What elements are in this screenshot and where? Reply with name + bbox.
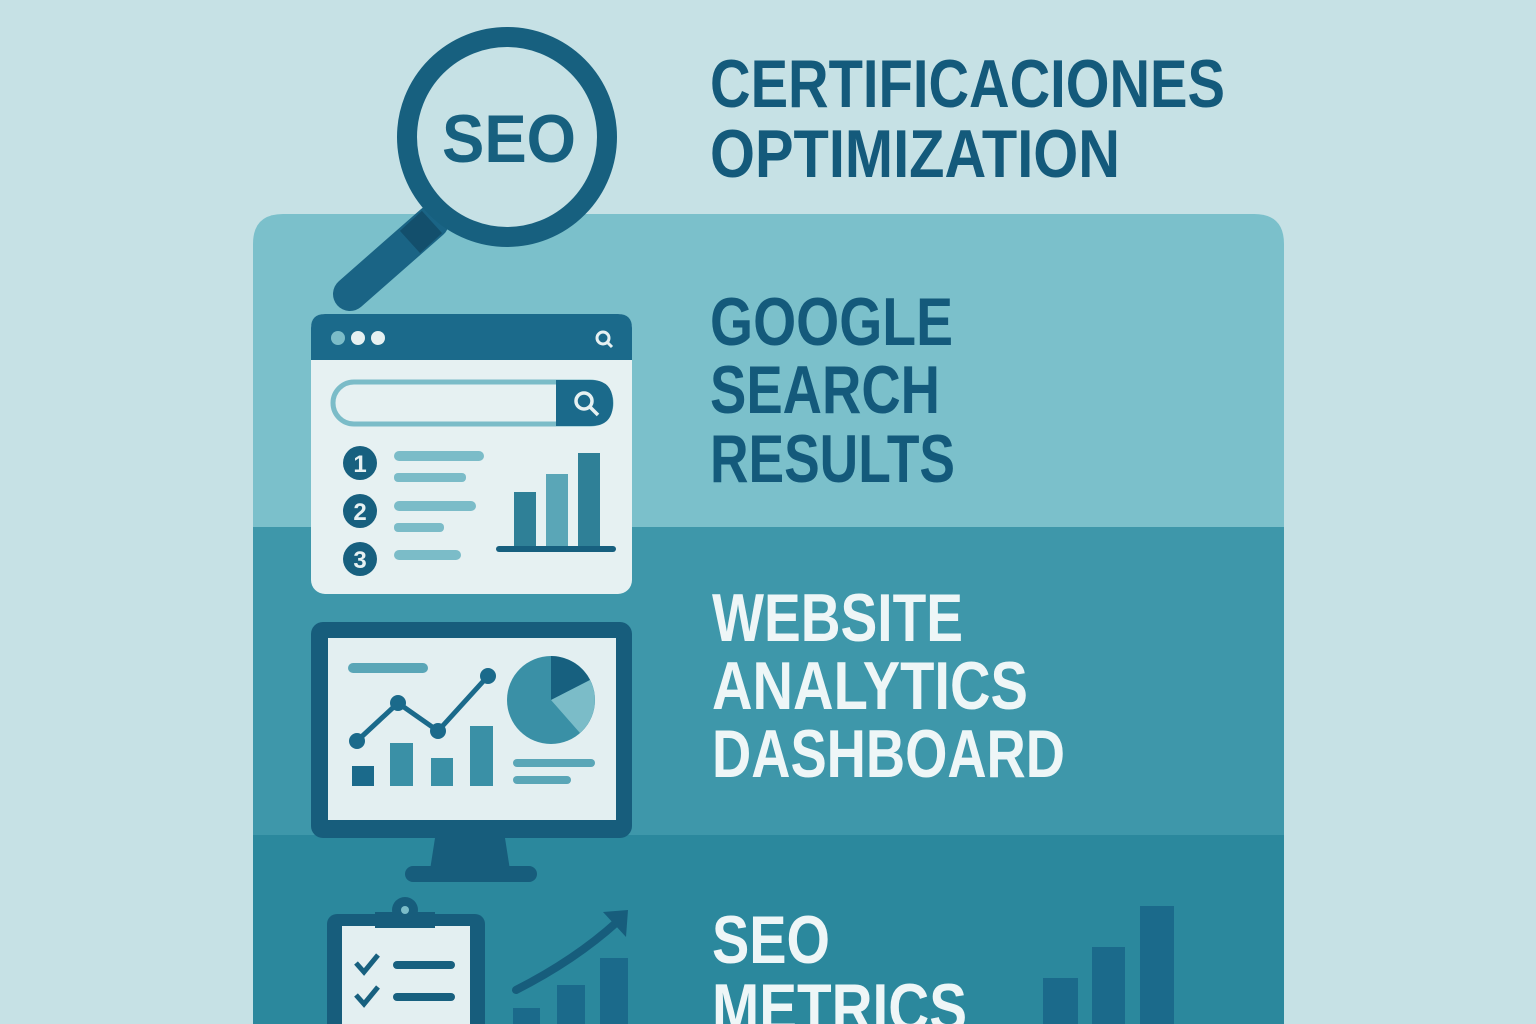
title: CERTIFICACIONES	[710, 46, 1225, 122]
icon: browser search results: 3	[353, 547, 367, 574]
section text: website analytics dashboard: DASHBOARD	[712, 716, 1065, 792]
section text: website analytics dashboard	[712, 580, 1065, 792]
icon: browser search results: 1	[353, 451, 367, 478]
section text: website analytics dashboard: ANALYTICS	[712, 648, 1028, 724]
section text: google search results: RESULTS	[710, 421, 955, 497]
icon: analytics monitor	[311, 622, 632, 882]
section text: seo metrics: SEO	[712, 902, 830, 978]
icon: clipboard and growth chart	[327, 897, 628, 1024]
title: OPTIMIZATION	[710, 116, 1120, 192]
section text: google search results: GOOGLE	[710, 284, 953, 360]
panel: main card	[253, 214, 1284, 1024]
icon: SEO magnifier	[350, 37, 607, 294]
icon: browser search results: 2	[353, 499, 367, 526]
bar chart: bottom right	[1043, 906, 1174, 1024]
section text: google search results	[710, 284, 955, 497]
section text: google search results: SEARCH	[710, 352, 940, 428]
section text: website analytics dashboard: WEBSITE	[712, 580, 963, 656]
icon: browser search results	[311, 314, 632, 594]
title	[710, 46, 1225, 192]
icon: SEO magnifier: SEO	[442, 101, 576, 177]
section text: seo metrics	[712, 902, 967, 1024]
